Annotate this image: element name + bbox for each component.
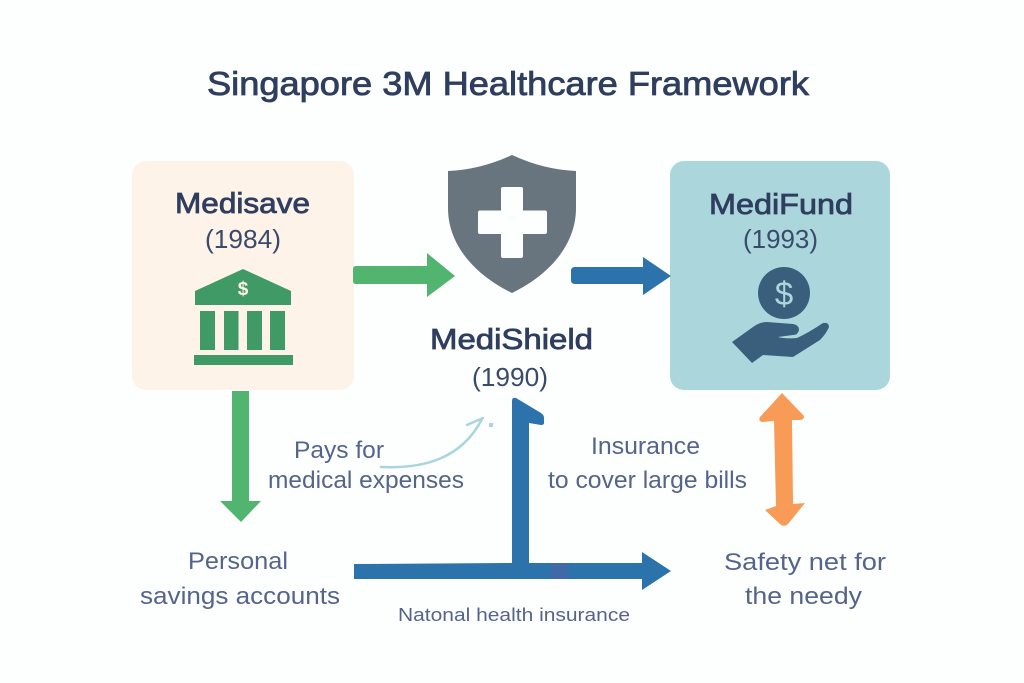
title: Singapore 3M Healthcare Framework — [207, 65, 810, 102]
icon: bank — [194, 269, 293, 365]
label: safety net for the needy: the needy — [745, 583, 862, 610]
arrow: curved pays-for link — [381, 418, 493, 467]
Medisave year: (1984) — [205, 224, 281, 254]
panel: MediFund — [670, 161, 890, 390]
label: personal savings accounts: Personal — [188, 548, 288, 575]
label: insurance to cover large bills — [548, 433, 747, 494]
arrow: Medisave to MediShield — [353, 253, 455, 297]
arrow: orange double-headed — [759, 393, 805, 526]
MediShield heading: MediShield — [430, 324, 593, 356]
panel: Medisave — [132, 161, 354, 390]
label: safety net for the needy — [724, 549, 886, 610]
label: pays for medical expenses: Pays for — [294, 437, 384, 464]
label: personal savings accounts: savings accounts — [140, 583, 340, 610]
label: pays for medical expenses — [268, 437, 464, 494]
MediFund year: (1993) — [743, 224, 818, 254]
MediFund heading: MediFund — [709, 189, 853, 221]
icon: hand with coin — [732, 267, 829, 363]
arrow: MediShield to MediFund — [571, 257, 671, 295]
label: insurance to cover large bills: Insurance — [591, 433, 700, 460]
label: personal savings accounts — [140, 548, 340, 610]
label: safety net for the needy: Safety net for — [724, 549, 886, 576]
MediShield year: (1990) — [472, 362, 548, 392]
icon: hand with coin: $ — [775, 275, 793, 312]
arrow: blue national insurance L — [354, 398, 671, 590]
label: national health insurance: Natonal health insurance — [398, 605, 630, 625]
icon: shield — [448, 155, 576, 293]
Medisave heading: Medisave — [175, 188, 310, 220]
label: pays for medical expenses: medical expenses — [268, 467, 464, 494]
arrow: Medisave down to savings — [220, 391, 261, 522]
label: insurance to cover large bills: to cover large bills — [548, 467, 747, 494]
icon: bank: $ — [238, 279, 249, 300]
